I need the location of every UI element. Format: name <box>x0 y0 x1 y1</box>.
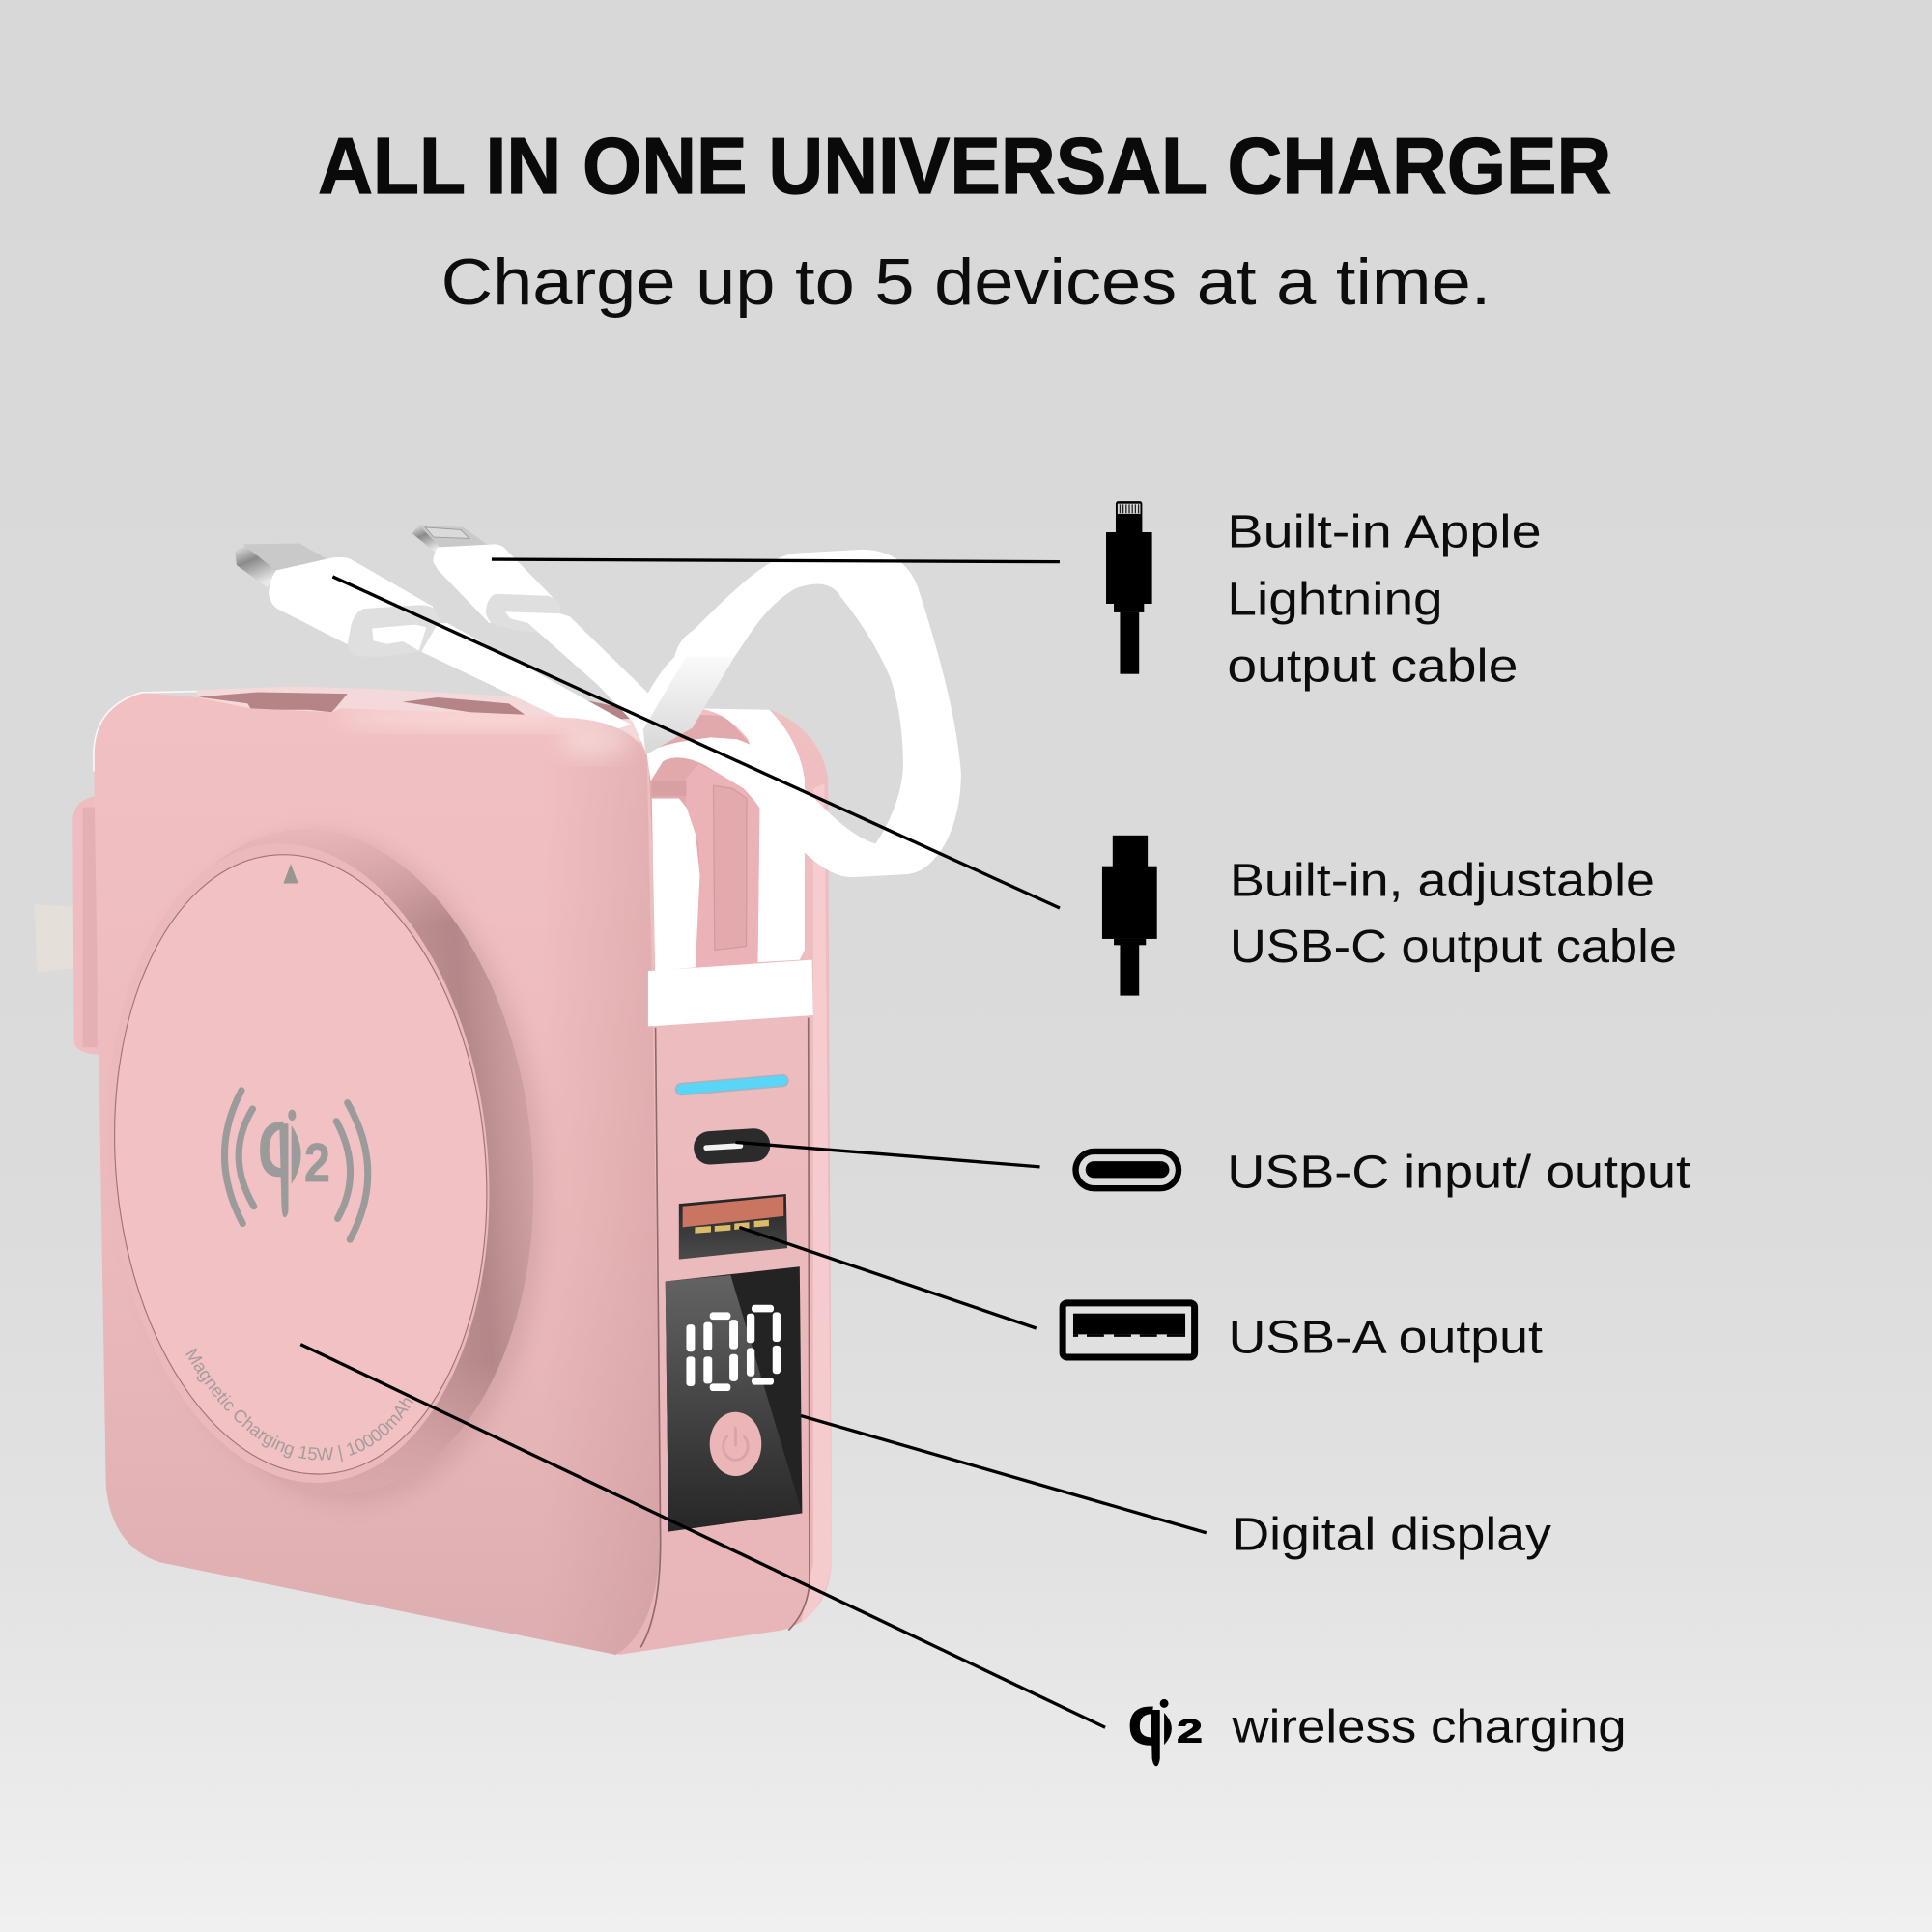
side panel with ports <box>640 960 813 1647</box>
magnetic wireless disk <box>114 830 548 1502</box>
icon: qi2 logo: 2 <box>1177 1714 1203 1750</box>
icon: usb-c port <box>1072 1149 1181 1191</box>
qi2 logo on disk: 2 <box>304 1132 330 1193</box>
usb-c cable <box>235 543 631 729</box>
icon: usb-c cable connector <box>1102 836 1157 996</box>
label: lightning cable <box>1227 505 1542 692</box>
usb-a port <box>679 1194 787 1260</box>
usb-c port <box>693 1127 771 1165</box>
pink centre clip <box>686 764 759 967</box>
battery readout segments <box>686 1305 781 1391</box>
label: usb-a port: USB-A output <box>1229 1312 1544 1364</box>
folding plug <box>35 796 99 1055</box>
icon: usb-a port <box>1063 1303 1195 1357</box>
label: wireless charging: wireless charging <box>1231 1701 1627 1753</box>
power bank product illustration <box>35 526 961 1655</box>
side face <box>616 708 832 1655</box>
white retaining strap <box>648 960 813 1026</box>
qi2 logo on disk <box>224 1091 368 1239</box>
power button <box>710 1412 761 1476</box>
label: usb-c port: USB-C input/ output <box>1227 1147 1691 1199</box>
label: usb-c cable: Built-in, adjustable <box>1230 854 1655 906</box>
right white band of the cable <box>698 708 805 962</box>
label: usb-c cable <box>1230 854 1677 973</box>
front face <box>94 692 661 1655</box>
icon: qi2 logo <box>1130 1699 1203 1766</box>
status led bar <box>681 1081 782 1090</box>
label: lightning cable: Lightning <box>1227 573 1443 625</box>
label: digital display: Digital display <box>1233 1509 1552 1561</box>
ribbon loop of cable <box>634 550 961 877</box>
lightning cable <box>412 525 650 727</box>
title: ALL IN ONE UNIVERSAL CHARGER <box>318 121 1611 211</box>
label: usb-c cable: USB-C output cable <box>1230 921 1677 973</box>
disk engraved text: Magnetic Charging 15W | 10000mAh <box>185 1349 413 1463</box>
subtitle: Charge up to 5 devices at a time. <box>441 246 1491 319</box>
digital display panel <box>666 1266 802 1531</box>
leader lines <box>300 559 1207 1727</box>
top edge recess <box>197 686 649 742</box>
label: lightning cable: output cable <box>1227 639 1518 692</box>
alignment arrow <box>283 864 298 884</box>
label: lightning cable: Built-in Apple <box>1227 505 1542 557</box>
icon: lightning connector <box>1106 501 1152 674</box>
left white band of the cable <box>652 799 699 971</box>
